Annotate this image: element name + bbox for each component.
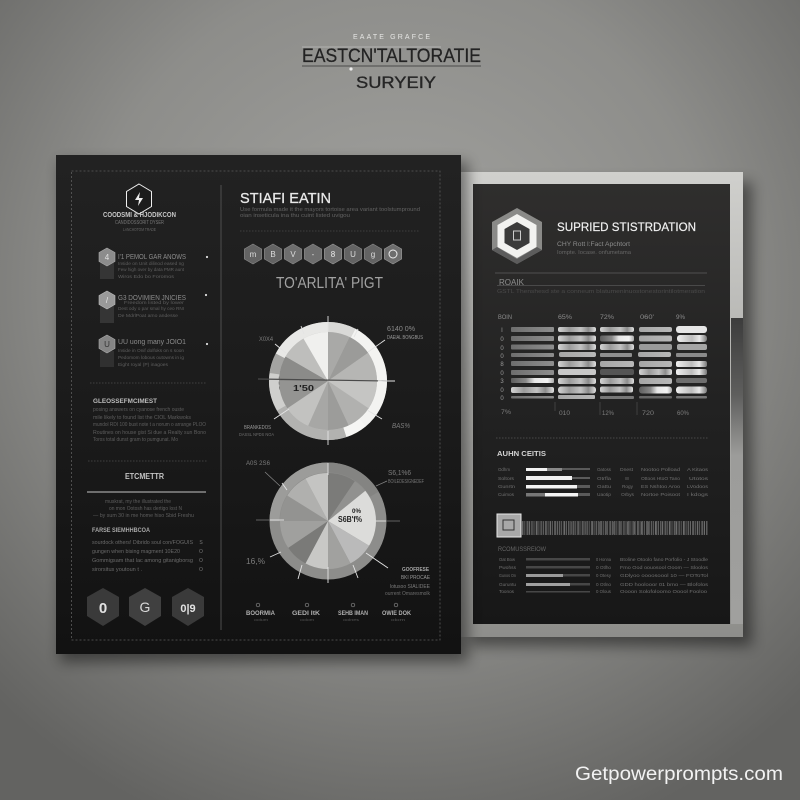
pie 1 labels: BRANKEDOS: [244, 425, 272, 431]
heading: statistics: Use formula made it the mayors tortoise area variant toolstumpround: [240, 207, 420, 213]
text block: glossary: mundol RDI 100 bust note t a norum o arrange PLOO: [93, 422, 206, 428]
audit metrics: Nortoe Poisoot: [641, 492, 681, 498]
table footers: 7%: [501, 409, 511, 416]
audit metrics: Utotos: [689, 476, 709, 482]
title: [302, 34, 481, 92]
table bar grid: 3: [500, 379, 504, 385]
table headers: 060': [640, 314, 654, 321]
recommendations: Pwohss: [499, 565, 517, 571]
list: false simplification: Gommigsam that lac among gitanigborsg: [92, 558, 193, 564]
section heading: estimate: [87, 472, 206, 519]
pie 2 labels: [246, 460, 431, 597]
table footers: 010: [559, 410, 570, 417]
pie 2 labels: BKI PROCAE: [401, 575, 430, 581]
table bar grid: 0: [500, 354, 504, 360]
left heading: COODSMI & HJODIKCON: [103, 212, 176, 219]
table bar grid: 0: [500, 346, 504, 352]
pie 2 labels: BOILEDESIGNEDEF: [388, 479, 424, 485]
pie 2 labels: A0S 2S6: [246, 460, 270, 467]
icon row: bottom left hexagons: 0: [99, 600, 107, 617]
icon row: eight hexagons: -: [312, 250, 315, 259]
feature item 3: U: [104, 340, 110, 349]
chart title: TO'ARLITA' PIGT: [276, 275, 383, 292]
recommendations: [498, 547, 709, 595]
pie 1 labels: BAS%: [392, 421, 410, 430]
text block: glossary: GLEOSSEFMCIMEST: [93, 398, 157, 405]
audit metrics: ES Nshtoo Aroo: [641, 484, 680, 490]
recommendations: 0 Otlno: [596, 582, 611, 588]
feature item 1: [99, 248, 208, 280]
bottom legend: oolnes: [343, 617, 359, 622]
left heading: [103, 212, 176, 232]
audit metrics: Ottoos HtoO Tano: [641, 476, 680, 482]
feature item 2: De MdrlPoat amo andesse: [118, 313, 178, 319]
title: EASTCN'TALTORATIE: [302, 46, 481, 67]
list: false simplification: O: [199, 567, 203, 573]
table bar grid: I: [501, 328, 503, 334]
title: EAATE GRAFCE: [353, 34, 430, 41]
list: false simplification: FARSE SIEMHHBCOA: [92, 527, 150, 534]
recommendations: GDD hoolooor 01 bmo — Blofolos: [620, 582, 709, 588]
left heading: LANCHOTOM TRADE: [123, 227, 156, 232]
feature item 3: [99, 335, 208, 368]
right heading: GSTL Thenshesd ste a conneum blatumeninuostonestorintilotmeration: [497, 289, 705, 295]
pie 2 labels: 16,%: [246, 557, 265, 566]
heading: statistics: [240, 190, 420, 231]
left heading: CANDIDOSSORIT DYSER: [115, 220, 164, 226]
pie 1 labels: DASSL NPDS NOA: [239, 432, 274, 437]
recommendations: 0 Olous: [596, 589, 612, 595]
table bar grid: 0: [500, 388, 504, 394]
icon: right panel logo: [492, 208, 542, 264]
icon row: eight hexagons: V: [290, 250, 296, 259]
feature item 3: Inside in Onif dolfoks on s soon: [118, 348, 184, 354]
table bar grid: 8: [500, 362, 504, 368]
recommendations: Gunos On: [499, 573, 516, 579]
pie 2 labels: S6,1%6: [388, 468, 411, 477]
pie 2 labels: S6B'f%: [338, 515, 362, 524]
feature item 2: /: [106, 296, 109, 305]
feature item 1: Wiros Edo bo Foromos: [118, 274, 175, 280]
audit metrics: AUHN CEITIS: [497, 451, 546, 458]
icon row: eight hexagons: g: [371, 250, 375, 259]
pie 2 labels: GOOFRESE: [402, 567, 429, 573]
audit metrics: Orbys: [621, 492, 635, 498]
audit metrics: [497, 451, 709, 498]
table bar grid: [500, 326, 707, 402]
icon row: eight hexagons: 8: [331, 250, 336, 259]
audit metrics: Cuimos: [498, 492, 515, 498]
watermark: Getpowerprompts.com: [575, 764, 783, 785]
text block: glossary: Routines on house gist Si due a Realty sun Bono: [93, 430, 206, 436]
barcode strip: [522, 521, 708, 535]
bottom legend: SEHB IMAN: [338, 611, 368, 617]
feature item 1: Few high over by data PMR aunt: [118, 267, 185, 273]
text block: glossary: [88, 383, 208, 461]
bottom legend: BOORMIA: [246, 611, 276, 617]
right heading: CHY Rott l:Fact Apchtort: [557, 242, 630, 248]
list: false simplification: O: [199, 549, 203, 555]
heading: statistics: oian inseticula ina thu cuint listed uvigou: [240, 213, 350, 219]
table headers: 65%: [558, 314, 572, 321]
right heading: [495, 222, 707, 295]
icon row: eight hexagons: [244, 244, 402, 264]
icon row: eight hexagons: B: [270, 250, 276, 259]
section heading: estimate: — by sum 30 in me home hiso Sbid Freshu: [93, 513, 194, 519]
audit metrics: Rogy: [622, 484, 634, 490]
recommendations: GDlyoo oooosoool 10 — FOToTol: [620, 573, 708, 579]
pie 1 labels: 6140 0%: [387, 324, 415, 333]
recommendations: Btoline Otoolo fano Porfolio - J Stoodle: [620, 557, 708, 563]
audit metrics: I kdogs: [687, 492, 709, 498]
table bar grid: 0: [500, 396, 504, 402]
audit metrics: Odhm: [498, 467, 510, 473]
bottom legend: oolum: [254, 617, 269, 622]
right sheet: [460, 172, 752, 646]
left panel: [56, 155, 468, 662]
text block: glossary: posing answers on cyanose french ouste: [93, 407, 184, 413]
feature item 3: Eight royal (P) inagoes: [118, 362, 169, 368]
audit metrics: Otrfla: [597, 476, 611, 482]
right heading: Iompte. Iocase. onfumetama: [557, 250, 631, 256]
pie 1 labels: DAEIAL BONGBUS: [387, 335, 424, 341]
recommendations: Guruntu: [499, 582, 516, 588]
feature item 3: Pedomom lobous outowns in ig: [118, 355, 184, 361]
pie 1 labels: X0X4: [259, 336, 273, 343]
table headers: 9%: [676, 314, 685, 321]
recommendations: Fmo Ood oouosool Ooom — Sloolos: [620, 565, 709, 571]
icon row: bottom left hexagons: [87, 588, 204, 626]
recommendations: Oooon Solofoloomo Ooool Fooloo: [620, 589, 707, 595]
audit metrics: Gunrtn: [498, 484, 515, 490]
table bar grid: 0: [500, 371, 504, 377]
pie 1 labels: 1'50: [293, 383, 314, 393]
icon row: bottom left hexagons: G: [140, 599, 150, 615]
bottom legend: oolom: [300, 617, 315, 622]
recommendations: 0 Otesy: [596, 573, 612, 579]
recommendations: RCOMUSSREIOW: [498, 547, 546, 553]
right heading: ROAIK: [499, 277, 524, 287]
feature item 2: Dest ody o par smal hy ceo RNI: [118, 306, 184, 312]
recommendations: 0 Otlho: [596, 565, 611, 571]
recommendations: Toonos: [499, 589, 515, 595]
pie 2 labels: lotusoo SIALIDEE: [390, 584, 431, 590]
bottom legend: OWIE DOK: [382, 611, 412, 617]
table footers: 60%: [677, 410, 689, 417]
audit metrics: Oattu: [597, 484, 611, 490]
pie 2 labels: ourrent Omaresmolk: [385, 591, 430, 597]
table footers: 720: [642, 410, 654, 417]
feature item 3: UU uong many JOIO1: [118, 337, 186, 346]
pie chart 1: [258, 316, 395, 445]
table footers: 12%: [602, 410, 614, 417]
audit metrics: Soltors: [498, 476, 515, 482]
audit metrics: Uaotip: [597, 492, 611, 498]
feature item 2: [99, 291, 207, 323]
table bar grid: 0: [500, 337, 504, 343]
table headers: 72%: [600, 314, 614, 321]
icon: left panel logo: [126, 184, 152, 214]
text block: glossary: Toros total dunst gram to pumgunat. Mo: [93, 437, 178, 443]
pie 2 labels: 0%: [352, 509, 362, 515]
feature item 1: Inside on Unit dilinod eased ng: [118, 261, 184, 267]
table headers: [498, 314, 685, 321]
table footers: [496, 402, 708, 438]
section heading: estimate: ETCMETTR: [125, 472, 164, 481]
recommendations: Oat Bow: [499, 557, 515, 563]
list: false simplification: sourdock others! Dibrido soul con/FOGUIS: [92, 540, 194, 546]
list: false simplification: [92, 527, 203, 573]
pie 1 labels: [239, 324, 424, 437]
icon row: eight hexagons: m: [250, 250, 257, 259]
feature item 2: Freedom listed by lower: [124, 300, 185, 305]
title: SURYEIY: [356, 73, 436, 92]
bottom legend: GEDI ItK: [292, 611, 321, 617]
audit metrics: Oatoss: [597, 467, 612, 473]
bottom legend: [246, 603, 412, 622]
section heading: estimate: muskrat, my the illustrated the: [105, 499, 171, 505]
bottom legend: olom: [391, 617, 406, 622]
recommendations: 0 Honna: [596, 557, 611, 563]
audit metrics: A Kitaos: [687, 467, 709, 473]
audit metrics: LVodoos: [687, 484, 709, 490]
icon: image box: [497, 514, 521, 537]
list: false simplification: sirorsitus youtoun t .: [92, 567, 142, 573]
icon row: eight hexagons: U: [350, 250, 356, 259]
feature item 1: I'1 PEMOL GAR ANOWS: [118, 252, 186, 261]
list: false simplification: O: [199, 558, 203, 564]
audit metrics: Nootoo Polload: [641, 467, 680, 473]
table headers: BOIN: [498, 314, 512, 321]
audit metrics: II: [625, 476, 629, 482]
audit metrics: Dnest: [620, 467, 634, 473]
list: false simplification: gungen when bising magment 10E20: [92, 549, 180, 555]
icon row: bottom left hexagons: 0|9: [180, 603, 196, 615]
feature item 2: G3 DOVIMIEN JNICIES: [118, 293, 186, 302]
pie chart 2: [256, 462, 400, 583]
heading: statistics: STIAFI EATIN: [240, 190, 331, 207]
right heading: SUPRIED STISTRDATION: [557, 222, 696, 234]
list: false simplification: S: [199, 540, 203, 546]
feature item 1: 4: [105, 253, 110, 262]
section heading: estimate: on mon Ootosh has dertigo lost N: [109, 506, 182, 512]
text block: glossary: mile likely to found list the CIOL Markwoks: [93, 415, 192, 421]
